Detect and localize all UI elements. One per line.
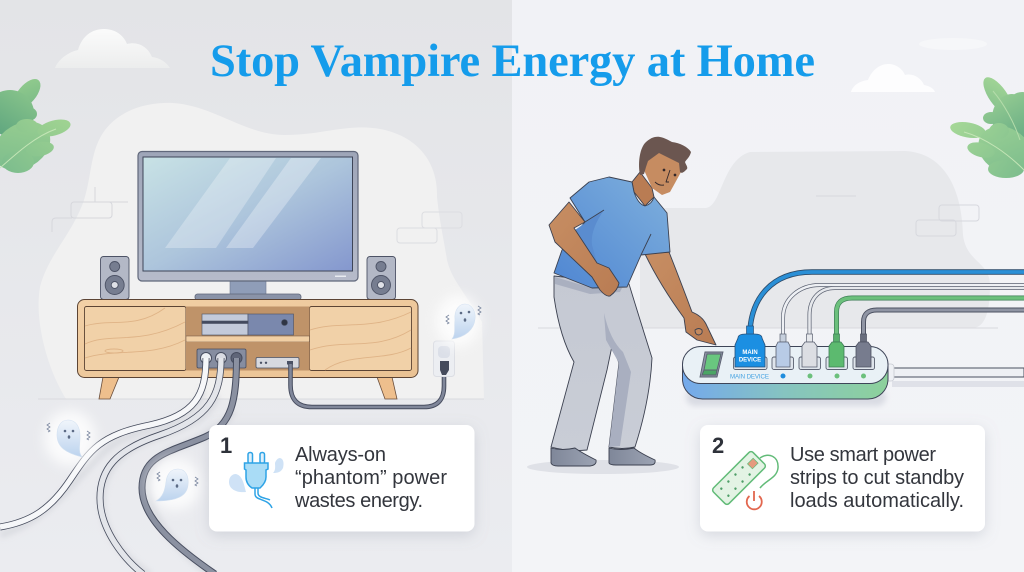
- socket panel: [197, 349, 246, 368]
- screen glare: [165, 158, 321, 248]
- panel: left background: [0, 0, 512, 572]
- card 1 text: Always-on: [295, 444, 386, 466]
- cloud: top right: [851, 64, 935, 92]
- trousers: [551, 276, 652, 451]
- left door: [84, 306, 186, 370]
- upper shelf bay: [186, 306, 310, 336]
- smart power strip: [682, 326, 1024, 406]
- face: [644, 151, 681, 195]
- card 2 text: [790, 444, 964, 512]
- socket 1: DEVICE: [739, 358, 761, 364]
- tv screen: [143, 157, 352, 271]
- facial features: [655, 169, 676, 185]
- rocker switch: [700, 352, 723, 377]
- back leaf: [978, 73, 1024, 142]
- step number 2: 2: [712, 433, 724, 458]
- sleeve fold: [585, 210, 651, 255]
- leaf vein: [0, 129, 56, 168]
- front leaf: [0, 112, 72, 180]
- cable: green: [836, 298, 1024, 336]
- cable: white 2: [100, 358, 221, 572]
- right speaker: [367, 256, 396, 300]
- socket 4: [826, 334, 848, 370]
- tv cabinet: [78, 300, 418, 399]
- callout card 2: [700, 425, 985, 532]
- wood grain: [85, 308, 411, 370]
- right door: [310, 306, 412, 370]
- leaf veins: [964, 132, 1024, 170]
- card 1 text: wastes energy.: [294, 490, 423, 512]
- cable shadows: [0, 390, 233, 572]
- lower shelf bay: [186, 342, 310, 370]
- set-top box: [256, 358, 299, 368]
- callout card 1: [209, 425, 474, 532]
- right bricks: [816, 196, 979, 236]
- wall outlet and plug: [434, 341, 454, 376]
- card 1 text: [294, 444, 447, 512]
- main device label: MAIN DEVICE: [730, 374, 769, 380]
- ghost: between cables: [149, 458, 201, 510]
- shoes: [551, 448, 596, 466]
- socket 1: MAIN: [742, 350, 758, 356]
- cloud: top left: [55, 29, 170, 68]
- person: [549, 137, 716, 466]
- card 2 text: strips to cut standby: [790, 467, 964, 489]
- ghost: near outlet: [436, 295, 481, 347]
- person: ground shadow: [527, 460, 679, 474]
- ghost: left floor: [44, 410, 96, 466]
- step number 1: 1: [220, 433, 232, 458]
- cable: dark: [864, 310, 1024, 336]
- card 1 text: “phantom” power: [295, 467, 447, 489]
- socket 5: [853, 334, 874, 370]
- cabinet legs: [99, 377, 397, 399]
- title: Stop Vampire Energy at Home: [210, 36, 815, 87]
- right side cables: [750, 272, 1024, 336]
- output cord: [890, 368, 1024, 377]
- plant: right leaves: [949, 73, 1024, 183]
- cable: light 2: [810, 288, 1024, 336]
- tv frame: [138, 152, 358, 281]
- panel: right background: [512, 0, 1024, 572]
- left bricks: [52, 187, 462, 243]
- output cord shadow: [892, 381, 1024, 387]
- socket 3: [799, 334, 820, 370]
- cord collar: [886, 364, 894, 381]
- tv stand: [230, 281, 266, 295]
- cloud: faint top right: [919, 38, 987, 50]
- card 2 text: Use smart power: [790, 444, 936, 466]
- socket 1: [734, 326, 767, 370]
- icon: power strip with power symbol: [711, 450, 778, 509]
- neck: [632, 172, 654, 206]
- right arm and hand: [645, 252, 716, 345]
- left speaker: [100, 256, 129, 300]
- hair: [639, 137, 691, 175]
- card 2 text: loads automatically.: [790, 490, 964, 512]
- strip top face: [682, 346, 888, 384]
- pressing finger detail: [695, 328, 702, 335]
- plant: left leaves: [0, 74, 72, 180]
- strip shadow: [686, 388, 886, 406]
- status dots: [780, 374, 866, 378]
- front leaf: [949, 117, 1024, 183]
- back leaf: [0, 74, 45, 136]
- waist shadow: [555, 277, 622, 294]
- cable: dark: [142, 358, 236, 572]
- cable: white 1: [0, 358, 206, 527]
- trouser shading: [604, 313, 631, 447]
- cabinet body: [78, 300, 418, 378]
- cable: blue: [750, 272, 1024, 330]
- power cord to wall: [290, 364, 444, 407]
- game console: [202, 314, 294, 335]
- left floor line: [38, 398, 484, 400]
- socket 2: [772, 334, 794, 370]
- icon: plug with ghosts: [229, 452, 284, 508]
- shirt shadow: [575, 210, 604, 263]
- cable: light 1: [783, 285, 1024, 336]
- television: [138, 152, 358, 300]
- shelf board: [186, 336, 310, 342]
- shirt: [554, 177, 670, 288]
- right floor line: [538, 327, 998, 329]
- strip body: [682, 346, 888, 399]
- left arm: [549, 202, 619, 296]
- right wall blob: [640, 151, 990, 328]
- tv power light: [335, 276, 346, 277]
- left wall blob: [39, 103, 484, 399]
